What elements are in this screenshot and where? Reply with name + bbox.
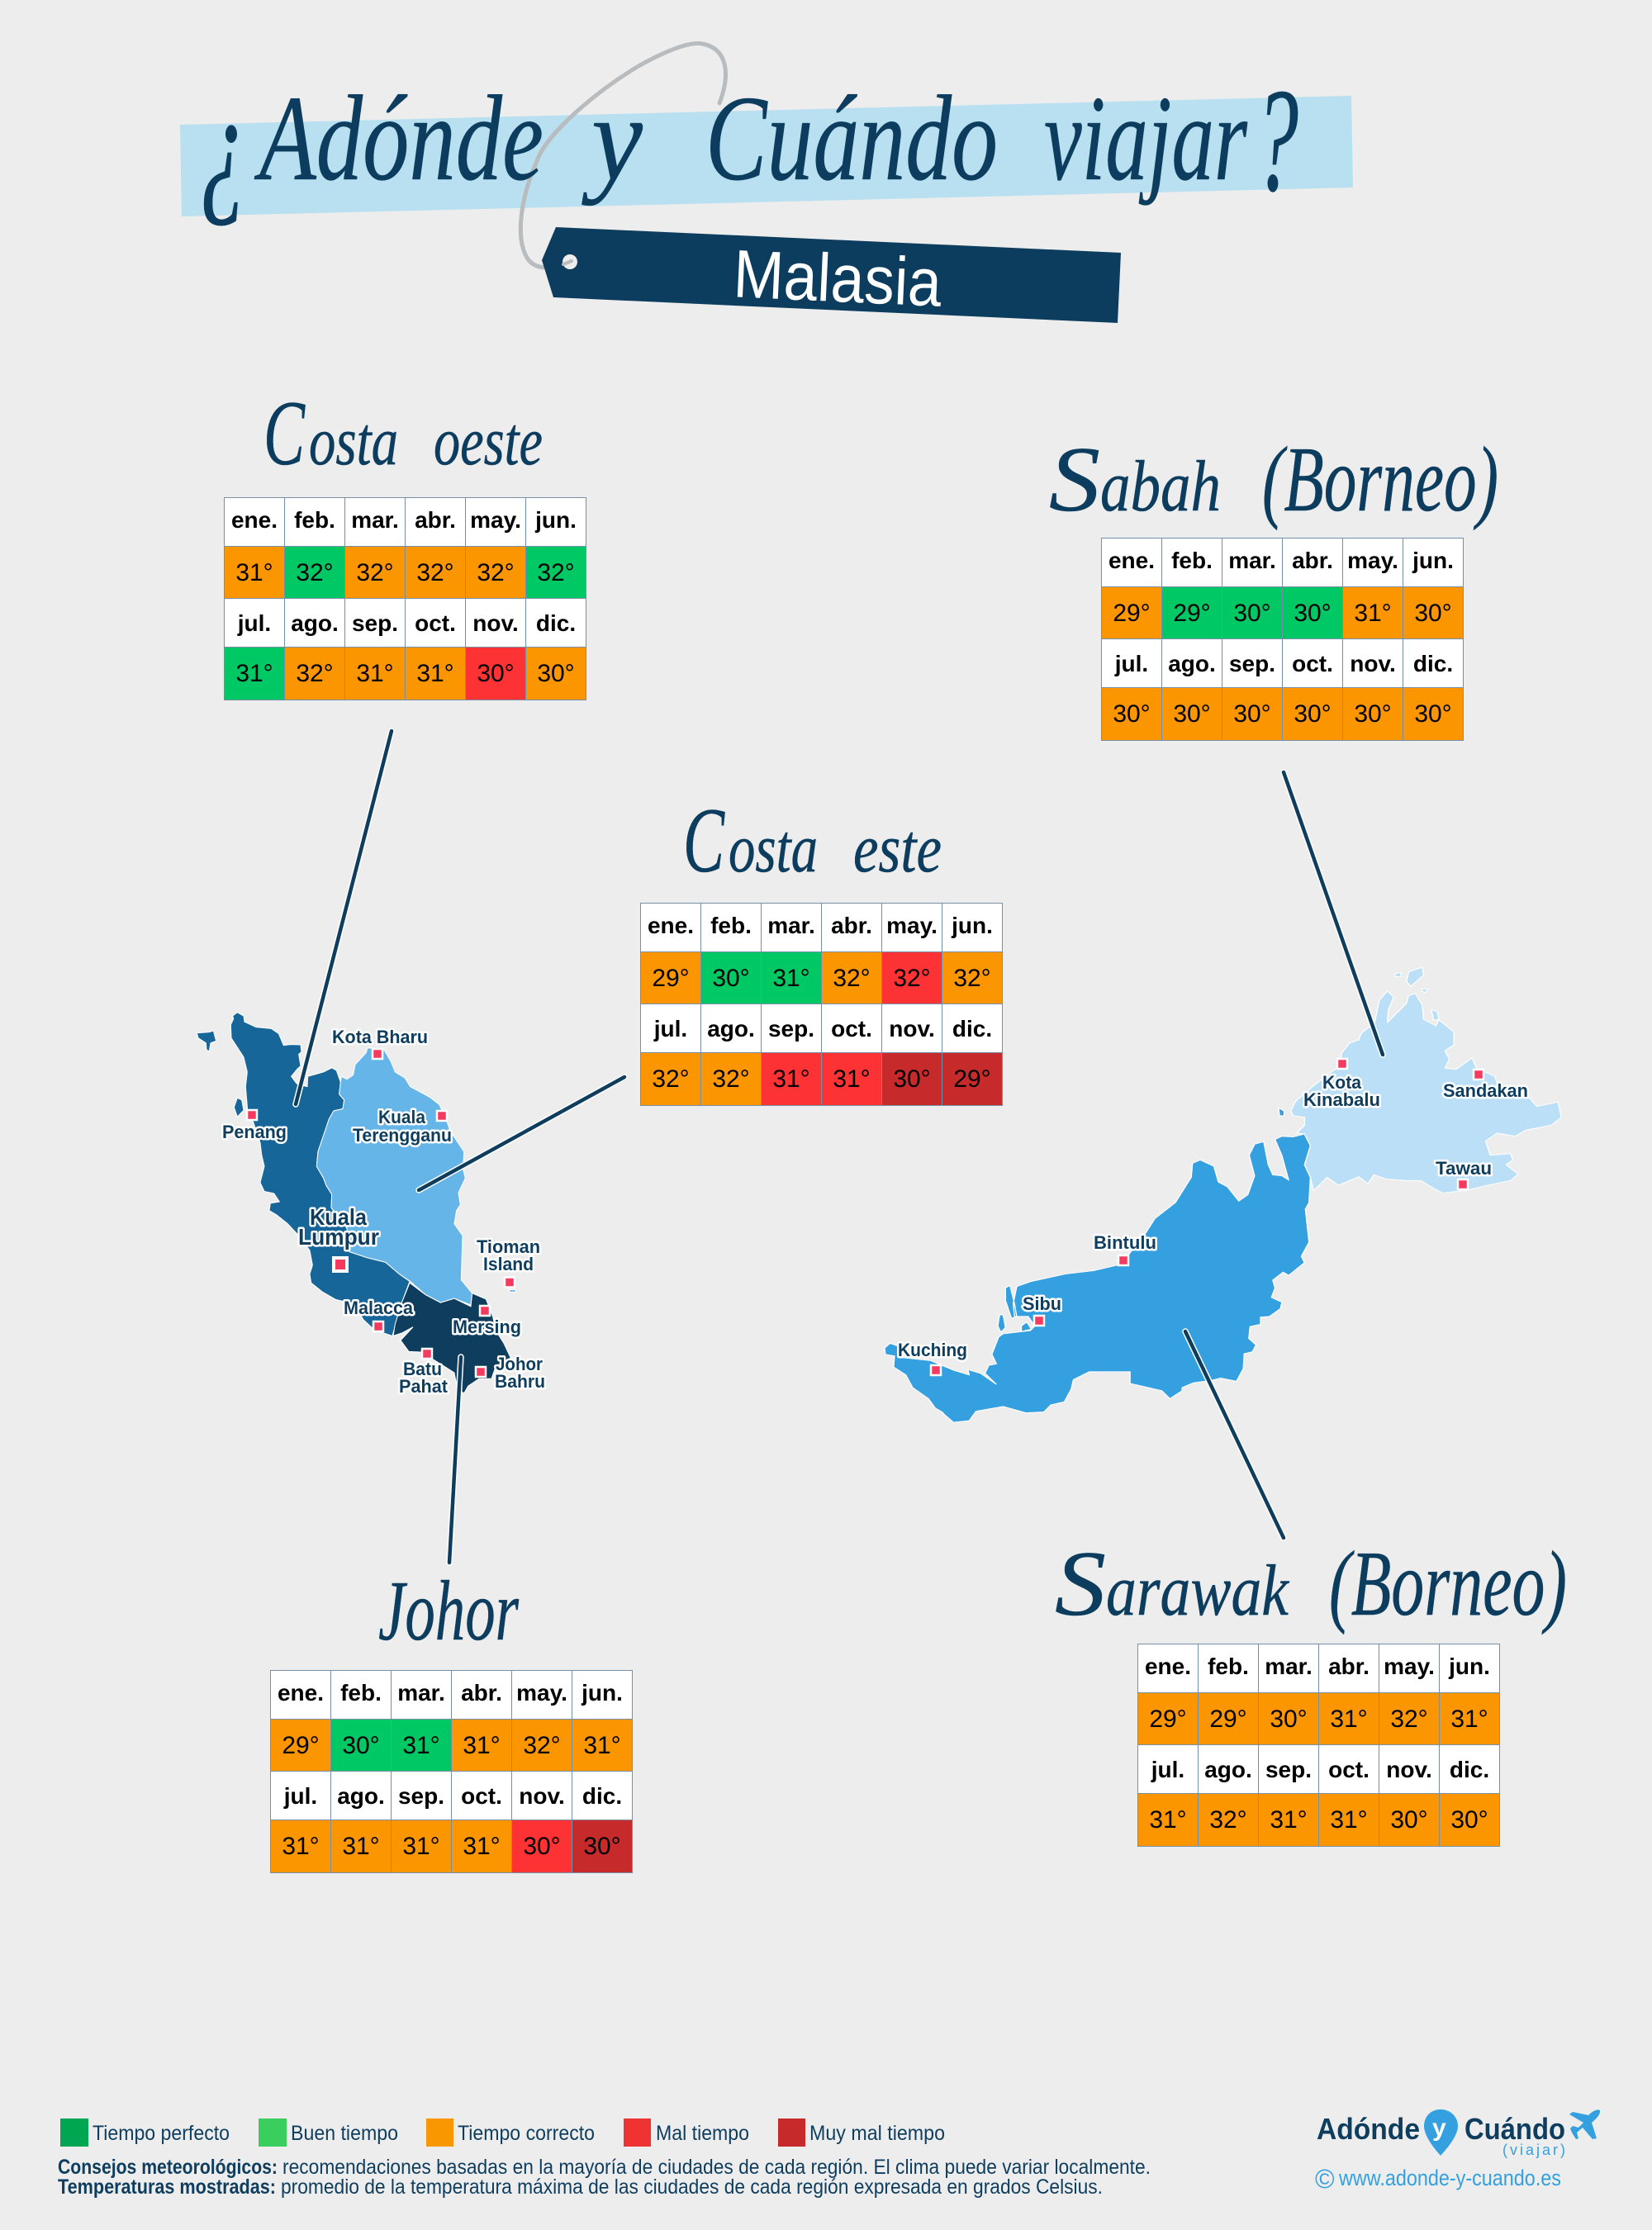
footnotes: Consejos meteorológicos: bbox=[58, 2156, 278, 2179]
city labels: Sibu bbox=[1023, 1293, 1061, 1314]
table: Sarawak: oct. bbox=[1328, 1757, 1370, 1782]
table: Costa este: ago. bbox=[707, 1016, 755, 1041]
table: Costa este: 30° bbox=[712, 965, 750, 992]
table: Johor: 29° bbox=[282, 1732, 320, 1759]
table: Sarawak: 30° bbox=[1390, 1806, 1428, 1834]
table: Costa este: 32° bbox=[652, 1065, 690, 1093]
table: Johor: dic. bbox=[582, 1783, 622, 1809]
legend: Muy mal tiempo bbox=[778, 2118, 945, 2147]
heading: Sarawak (Borneo) bbox=[1055, 1533, 1567, 1635]
heading: Costa este bbox=[683, 790, 942, 892]
table: Sarawak: 30° bbox=[1450, 1806, 1488, 1834]
table: Johor: 31° bbox=[583, 1732, 621, 1759]
table: Johor: may. bbox=[516, 1680, 567, 1705]
table: Costa oeste: abr. bbox=[415, 507, 456, 532]
table: Costa este: jun. bbox=[952, 912, 993, 938]
table: Johor: 31° bbox=[463, 1833, 501, 1860]
legend bbox=[60, 2118, 945, 2147]
table: Johor: 31° bbox=[282, 1833, 320, 1860]
legend: Mal tiempo bbox=[624, 2118, 749, 2147]
title: ¿ bbox=[200, 63, 248, 227]
table: Sabah: jun. bbox=[1412, 547, 1454, 573]
heading: Sarawak (Borneo): S bbox=[1055, 1533, 1106, 1635]
country tag bbox=[542, 227, 1121, 323]
city labels: Kinabalu bbox=[1303, 1089, 1380, 1110]
table: Costa oeste: sep. bbox=[352, 610, 398, 636]
table: Johor: oct. bbox=[461, 1783, 502, 1809]
legend: Mal tiempo: Mal tiempo bbox=[656, 2122, 749, 2145]
table: Sabah: oct. bbox=[1292, 651, 1333, 676]
table: Sabah: jul. bbox=[1115, 651, 1148, 676]
table: Costa este: mar. bbox=[767, 912, 815, 938]
table: Costa este: oct. bbox=[831, 1016, 872, 1041]
legend: Buen tiempo: Buen tiempo bbox=[291, 2122, 398, 2145]
table: Sabah: dic. bbox=[1413, 651, 1453, 676]
table: Sarawak: 31° bbox=[1149, 1806, 1187, 1834]
city labels: Terengganu bbox=[353, 1125, 452, 1146]
table: Sabah: 30° bbox=[1414, 700, 1452, 728]
table: Johor: 30° bbox=[583, 1833, 621, 1860]
table: Johor: sep. bbox=[398, 1783, 444, 1809]
table: Costa este: jul. bbox=[654, 1016, 687, 1041]
table: Sabah: sep. bbox=[1229, 651, 1275, 676]
footnotes bbox=[58, 2156, 1151, 2199]
logo: www.adonde-y-cuando.es bbox=[1338, 2166, 1561, 2190]
table: Sarawak: may. bbox=[1384, 1654, 1435, 1678]
city labels bbox=[222, 1027, 1528, 1397]
table: Sarawak: ago. bbox=[1204, 1757, 1252, 1782]
table: Johor: nov. bbox=[519, 1783, 565, 1809]
table: Sabah: 30° bbox=[1233, 700, 1271, 728]
table: Sarawak: mar. bbox=[1265, 1654, 1313, 1678]
table: Sarawak: 31° bbox=[1450, 1706, 1488, 1733]
table: Costa oeste: ago. bbox=[291, 610, 339, 636]
country tag: Malasia bbox=[732, 236, 943, 321]
table: Sarawak: sep. bbox=[1265, 1757, 1312, 1782]
table: Sabah: 30° bbox=[1414, 600, 1452, 627]
table: Johor: jul. bbox=[284, 1783, 317, 1809]
table: Sarawak: 31° bbox=[1330, 1806, 1368, 1834]
table: Costa este: 29° bbox=[953, 1065, 991, 1093]
table: Costa este: 32° bbox=[712, 1065, 750, 1093]
table: Sabah: feb. bbox=[1171, 547, 1213, 573]
table: Costa oeste: 32° bbox=[296, 660, 334, 687]
table: Costa oeste: 31° bbox=[235, 559, 273, 586]
heading: Costa este: este bbox=[853, 810, 942, 887]
city labels: Lumpur bbox=[298, 1224, 379, 1250]
map: Peninsular Malaysia bbox=[197, 1013, 516, 1393]
map: Borneo bbox=[885, 967, 1561, 1422]
table: Sabah: mar. bbox=[1228, 547, 1276, 573]
table: Sabah: 30° bbox=[1233, 600, 1271, 627]
table: Sabah: 29° bbox=[1113, 600, 1151, 627]
table: Sabah: ene. bbox=[1108, 547, 1155, 573]
city labels: Bintulu bbox=[1094, 1232, 1156, 1253]
table: Costa oeste: 32° bbox=[477, 559, 515, 586]
table: Sarawak: 32° bbox=[1390, 1706, 1428, 1733]
table: Sarawak: jun. bbox=[1449, 1654, 1490, 1678]
title: y bbox=[582, 71, 643, 206]
city labels: Mersing bbox=[453, 1317, 521, 1337]
logo bbox=[1315, 2109, 1600, 2194]
table: Costa este: 31° bbox=[772, 965, 810, 992]
heading: Costa oeste: osta bbox=[309, 403, 398, 480]
table: Sabah: nov. bbox=[1350, 651, 1396, 676]
heading: Sarawak (Borneo): arawak bbox=[1106, 1551, 1290, 1631]
city labels: Tawau bbox=[1436, 1158, 1492, 1179]
table: Sabah: 31° bbox=[1354, 600, 1392, 627]
table: Sarawak: 29° bbox=[1209, 1706, 1247, 1733]
table: Sarawak: 31° bbox=[1270, 1806, 1308, 1834]
legend: Tiempo correcto bbox=[426, 2118, 595, 2147]
table: Johor: 31° bbox=[402, 1732, 440, 1759]
logo: y bbox=[1432, 2114, 1446, 2142]
title: Cuándo bbox=[705, 71, 998, 206]
table: Costa oeste: 30° bbox=[537, 660, 575, 687]
city labels: Johor bbox=[496, 1354, 543, 1374]
legend: Tiempo correcto: Tiempo correcto bbox=[458, 2122, 595, 2145]
heading: Sabah (Borneo): (Borneo) bbox=[1262, 429, 1498, 531]
table: Costa oeste: ene. bbox=[231, 507, 278, 532]
table: Sabah: 29° bbox=[1173, 600, 1211, 627]
city labels: Kota bbox=[1322, 1072, 1362, 1093]
city markers bbox=[247, 1049, 1483, 1377]
heading: Costa oeste: C bbox=[263, 382, 306, 485]
table: Johor: 31° bbox=[342, 1833, 380, 1860]
table: Costa este: may. bbox=[886, 912, 938, 938]
region: Sabah bbox=[1291, 967, 1561, 1193]
table: Sabah: ago. bbox=[1168, 651, 1216, 676]
table: Costa oeste: 32° bbox=[356, 559, 394, 586]
heading: Costa oeste bbox=[263, 382, 543, 485]
table: Costa oeste: 32° bbox=[416, 559, 454, 586]
table: Costa oeste: 30° bbox=[477, 660, 515, 687]
heading: Costa oeste: oeste bbox=[434, 403, 543, 480]
table: Sabah: abr. bbox=[1292, 547, 1333, 573]
table: Johor: ene. bbox=[278, 1680, 324, 1705]
table: Johor bbox=[270, 1670, 633, 1873]
table: Costa oeste bbox=[224, 497, 586, 700]
legend: Tiempo perfecto: Tiempo perfecto bbox=[93, 2122, 230, 2145]
table: Costa este: 29° bbox=[652, 965, 690, 992]
table: Costa este: 32° bbox=[893, 965, 931, 992]
table: Sarawak: abr. bbox=[1328, 1654, 1370, 1678]
heading: Costa este: osta bbox=[729, 810, 818, 887]
table: Sabah: 30° bbox=[1113, 700, 1151, 728]
region: Costa este bbox=[316, 1048, 516, 1305]
table: Costa este: 32° bbox=[833, 965, 871, 992]
title: ? bbox=[1255, 58, 1298, 222]
city labels: Kota Bharu bbox=[332, 1027, 428, 1047]
city labels: Batu bbox=[403, 1359, 442, 1379]
footnotes: promedio de la temperatura máxima de las ciudades de cada región expresada en grados Celsius. bbox=[281, 2175, 1103, 2199]
legend: Muy mal tiempo: Muy mal tiempo bbox=[809, 2122, 945, 2145]
table: Sarawak: nov. bbox=[1386, 1757, 1432, 1782]
table: Costa oeste: feb. bbox=[294, 507, 335, 532]
table: Sarawak: feb. bbox=[1208, 1654, 1249, 1678]
table: Sabah: 30° bbox=[1294, 700, 1332, 728]
connector: Johor bbox=[449, 1357, 461, 1563]
table: Costa este: nov. bbox=[889, 1016, 935, 1041]
table: Sarawak: 29° bbox=[1149, 1706, 1187, 1733]
heading: Sabah (Borneo): abah bbox=[1100, 447, 1221, 527]
table: Costa este: ene. bbox=[648, 912, 694, 938]
legend: Tiempo perfecto bbox=[60, 2118, 230, 2147]
city labels: Kuching bbox=[898, 1340, 967, 1360]
logo: Adónde bbox=[1317, 2112, 1420, 2146]
table: Johor: ago. bbox=[337, 1783, 385, 1809]
table: Sarawak: jul. bbox=[1151, 1757, 1184, 1782]
icon: plane bbox=[1569, 2109, 1600, 2139]
table: Costa este: 31° bbox=[833, 1065, 871, 1093]
table: Costa este: 31° bbox=[772, 1065, 810, 1093]
heading: Costa este: C bbox=[683, 790, 725, 892]
city labels: Kuala bbox=[378, 1107, 426, 1127]
footnotes: Temperaturas mostradas: bbox=[58, 2175, 276, 2199]
table: Costa oeste: 32° bbox=[537, 559, 575, 586]
table: Sabah bbox=[1101, 538, 1464, 741]
table: Johor: 31° bbox=[463, 1732, 501, 1759]
city labels: Malacca bbox=[344, 1298, 414, 1318]
table: Costa oeste: nov. bbox=[472, 610, 519, 636]
region: Johor bbox=[393, 1283, 510, 1393]
table: Johor: abr. bbox=[461, 1680, 502, 1705]
table: Costa oeste: 31° bbox=[416, 660, 454, 687]
table: Costa este: abr. bbox=[831, 912, 872, 938]
table: Costa oeste: jul. bbox=[238, 610, 271, 636]
city labels: Kuala bbox=[310, 1204, 367, 1230]
table: Costa oeste: jun. bbox=[535, 507, 577, 532]
table: Costa este: feb. bbox=[710, 912, 752, 938]
table: Johor: 30° bbox=[523, 1833, 561, 1860]
table: Costa oeste: 32° bbox=[296, 559, 334, 586]
tag string bbox=[520, 44, 725, 268]
title: viajar bbox=[1044, 71, 1248, 206]
table: Sarawak: 32° bbox=[1209, 1806, 1247, 1834]
table: Sarawak bbox=[1137, 1644, 1500, 1847]
heading: Johor: Johor bbox=[378, 1563, 519, 1658]
table: Costa oeste: may. bbox=[470, 507, 521, 532]
table: Johor: 31° bbox=[402, 1833, 440, 1860]
table: Costa oeste: 31° bbox=[356, 660, 394, 687]
logo: © bbox=[1315, 2164, 1335, 2194]
table: Costa oeste: 31° bbox=[235, 660, 273, 687]
table: Sarawak: 31° bbox=[1330, 1706, 1368, 1733]
legend: Buen tiempo bbox=[259, 2118, 398, 2147]
city labels: Pahat bbox=[399, 1376, 449, 1397]
table: Costa oeste: mar. bbox=[351, 507, 399, 532]
title: Adónde bbox=[254, 71, 544, 206]
logo: ( v i a j a r ) bbox=[1502, 2142, 1565, 2158]
connector: Sabah bbox=[1284, 772, 1383, 1055]
city labels: Tioman bbox=[477, 1236, 540, 1257]
table: Sarawak: dic. bbox=[1450, 1757, 1489, 1782]
region: Sarawak bbox=[885, 1108, 1310, 1422]
connector: Costa oeste bbox=[296, 731, 392, 1104]
region: Costa oeste bbox=[197, 1013, 410, 1336]
table: Johor: 30° bbox=[342, 1732, 380, 1759]
heading: Sabah (Borneo) bbox=[1049, 429, 1498, 531]
icon: map pin bbox=[1424, 2109, 1458, 2156]
city labels: Sandakan bbox=[1443, 1080, 1528, 1101]
table: Johor: mar. bbox=[397, 1680, 445, 1705]
table: Sarawak: ene. bbox=[1145, 1654, 1191, 1678]
connector: Costa este bbox=[419, 1077, 624, 1190]
heading: Sabah (Borneo): S bbox=[1049, 429, 1100, 531]
title banner bbox=[180, 96, 1353, 216]
table: Costa este: 30° bbox=[893, 1065, 931, 1093]
logo: Cuándo bbox=[1464, 2112, 1565, 2146]
table: Johor: 32° bbox=[523, 1732, 561, 1759]
table: Costa oeste: dic. bbox=[536, 610, 576, 636]
table: Sarawak: 30° bbox=[1270, 1706, 1308, 1733]
table: Costa oeste: oct. bbox=[415, 610, 456, 636]
table: Johor: feb. bbox=[340, 1680, 382, 1705]
city labels: Island bbox=[483, 1254, 534, 1274]
title bbox=[200, 58, 1298, 227]
table: Sabah: 30° bbox=[1354, 700, 1392, 728]
city labels: Penang bbox=[222, 1122, 287, 1142]
table: Costa este: dic. bbox=[952, 1016, 992, 1041]
table: Costa este bbox=[640, 903, 1003, 1106]
table: Costa este: 32° bbox=[953, 965, 991, 992]
footnotes: recomendaciones basadas en la mayoría de ciudades de cada región. El clima puede variar localmente. bbox=[282, 2156, 1151, 2179]
connector: Sarawak bbox=[1185, 1331, 1284, 1538]
city labels: Bahru bbox=[495, 1371, 545, 1392]
table: Johor: jun. bbox=[582, 1680, 623, 1705]
table: Sabah: 30° bbox=[1173, 700, 1211, 728]
table: Costa este: sep. bbox=[768, 1016, 814, 1041]
table: Sabah: may. bbox=[1347, 547, 1398, 573]
table: Sabah: 30° bbox=[1294, 600, 1332, 627]
